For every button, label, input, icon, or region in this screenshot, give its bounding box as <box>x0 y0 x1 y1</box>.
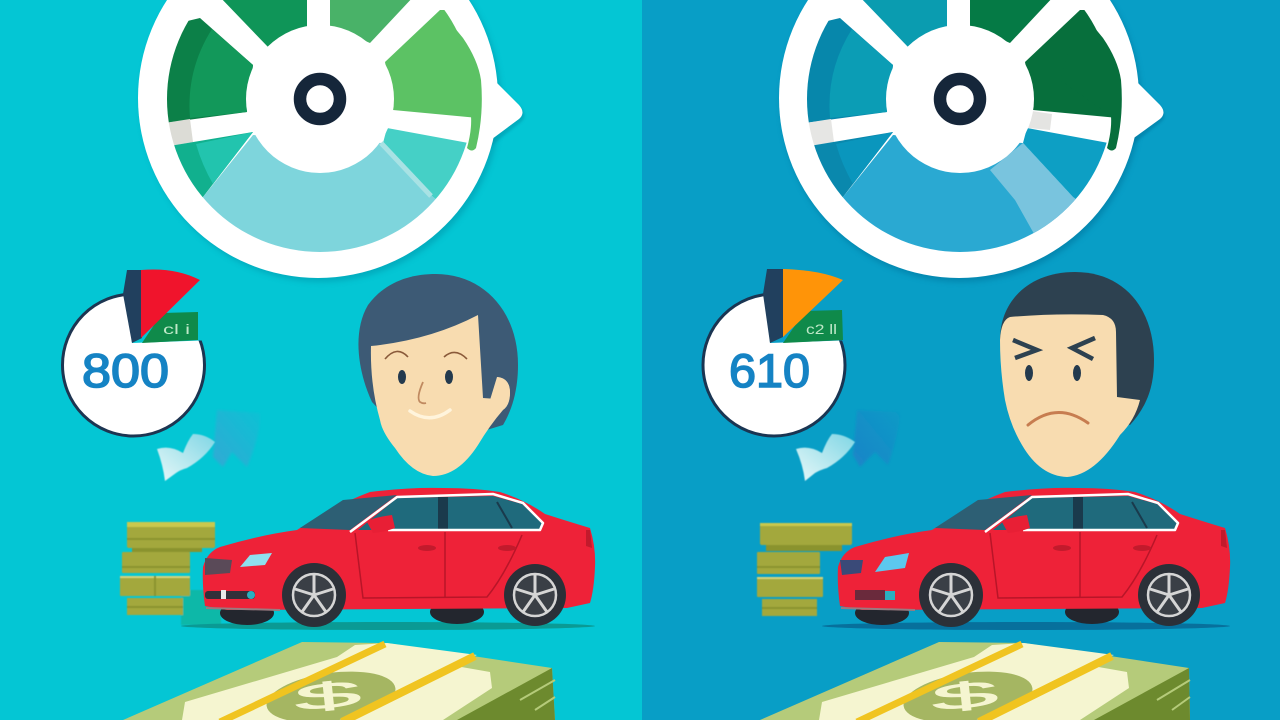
icon: butterfly smudge right <box>796 410 900 481</box>
score dial: 610 <box>703 269 855 436</box>
car ground shadow <box>822 622 1230 630</box>
gauge: right <box>779 0 1165 283</box>
car: right <box>822 488 1230 630</box>
car mirror <box>367 515 395 533</box>
car headlight <box>875 553 909 572</box>
car windshield <box>935 495 1032 530</box>
car body <box>838 488 1230 610</box>
bill coin <box>263 664 399 720</box>
car doors <box>355 532 522 598</box>
face: sad <box>1000 272 1154 477</box>
bill bands <box>857 644 1022 720</box>
gauge green arc <box>1060 10 1122 150</box>
gauge: left <box>138 0 525 284</box>
score number: 610 <box>729 344 810 397</box>
car: left <box>181 488 595 630</box>
car grille <box>840 560 863 575</box>
car headlight <box>240 553 272 567</box>
car windshield <box>300 495 397 530</box>
face: happy <box>358 274 518 476</box>
car bumper <box>855 590 885 600</box>
money bill: right <box>760 642 1190 720</box>
money stack: right <box>757 523 852 616</box>
score label: cl i <box>163 321 190 337</box>
money stack: left <box>120 522 221 625</box>
score dial: 800 <box>62 269 215 436</box>
car bumper <box>205 591 255 599</box>
bill bands <box>220 644 385 720</box>
gauge centre ring <box>300 79 340 119</box>
ear <box>490 377 510 412</box>
gauge centre ring <box>940 79 980 119</box>
panel: left background <box>0 0 642 720</box>
car ground shadow <box>181 622 595 630</box>
car mirror <box>1002 515 1030 533</box>
bill dollar sign: $ <box>929 672 1000 719</box>
car grille <box>205 558 232 575</box>
car taillight <box>586 530 592 548</box>
gauge pointer <box>1120 80 1164 148</box>
money bill: left <box>123 642 555 720</box>
gauge hub <box>886 25 1034 173</box>
car side windows <box>993 496 1177 530</box>
icon: butterfly smudge left <box>157 410 260 481</box>
car doors <box>990 532 1157 598</box>
car wheels <box>919 563 983 627</box>
car body <box>203 488 595 610</box>
car side windows <box>358 496 542 530</box>
bill dollar sign: $ <box>292 672 363 719</box>
panel: right background <box>642 0 1280 720</box>
gauge pointer <box>480 80 522 148</box>
gauge hub <box>246 25 394 173</box>
gauge green arc <box>420 10 482 150</box>
score number: 800 <box>82 344 169 397</box>
car wheels <box>282 563 346 627</box>
score label: c2 ll <box>806 321 837 337</box>
bill coin <box>900 664 1036 720</box>
car taillight <box>1221 530 1227 548</box>
